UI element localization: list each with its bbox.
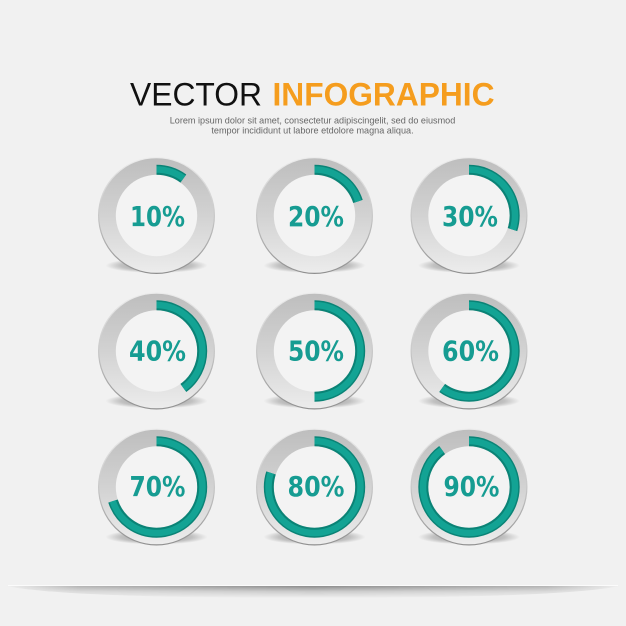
dial: 50% xyxy=(256,292,373,410)
dial: 40%: 40% xyxy=(129,334,186,368)
floor shadow xyxy=(8,585,618,596)
dial: 90%: 90% xyxy=(444,470,500,503)
dial: 70%: 70% xyxy=(130,470,186,503)
dial: 10%: 10% xyxy=(130,200,185,233)
subtitle: tempor incididunt ut labore etdolore magna aliqua. xyxy=(211,126,414,136)
title: INFOGRAPHIC xyxy=(272,76,494,112)
subtitle xyxy=(170,116,455,136)
dial: 90% xyxy=(410,428,528,546)
dial: 20%: 20% xyxy=(288,200,344,233)
dial: 60% xyxy=(410,292,528,410)
subtitle: Lorem ipsum dolor sit amet, consectetur adipiscingelit, sed do eiusmod xyxy=(170,116,455,126)
dial: 20% xyxy=(256,157,373,274)
dial: 80% xyxy=(256,428,373,546)
dial: 40% xyxy=(98,292,215,410)
dial: 50%: 50% xyxy=(288,334,344,368)
dial: 30% xyxy=(410,157,528,274)
dial: 80%: 80% xyxy=(288,470,344,503)
title: VECTOR xyxy=(130,76,262,112)
dial: 60%: 60% xyxy=(442,334,499,368)
dial: 30%: 30% xyxy=(442,200,498,233)
dial: 70% xyxy=(98,428,215,546)
dial: 10% xyxy=(98,157,215,274)
